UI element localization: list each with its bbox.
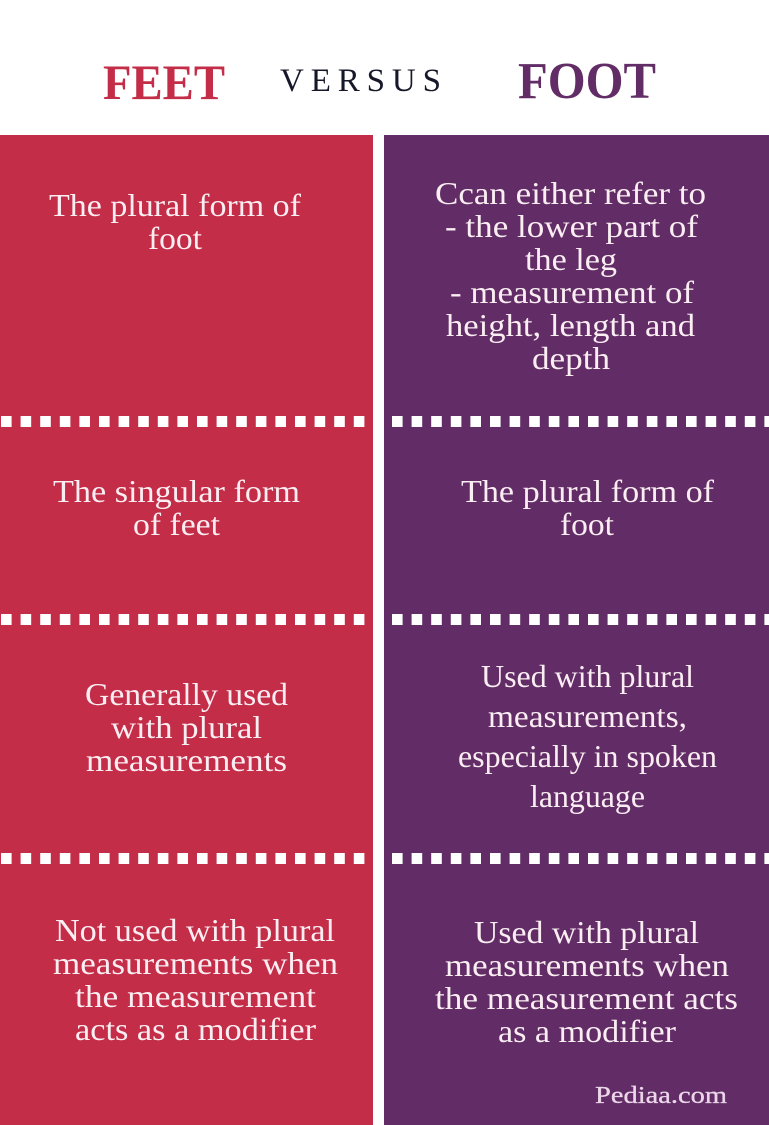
panel: feet column bbox=[0, 135, 373, 1125]
text: feet row 1: foot bbox=[148, 220, 202, 256]
text: feet row 3: Generally used bbox=[85, 676, 288, 712]
text: foot row 1: - measurement of bbox=[450, 274, 694, 310]
text: feet row 2 bbox=[53, 473, 300, 542]
text: feet row 4: acts as a modifier bbox=[75, 1011, 316, 1047]
text: foot row 3: especially in spoken bbox=[458, 738, 717, 774]
text: feet row 4: measurements when bbox=[53, 945, 338, 981]
text: foot row 3: Used with plural bbox=[481, 658, 694, 694]
text: foot row 1: depth bbox=[532, 340, 610, 376]
text: foot row 1: height, length and bbox=[446, 307, 695, 343]
text: foot row 4: the measurement acts bbox=[435, 980, 738, 1016]
text: feet row 2: of feet bbox=[133, 506, 220, 542]
text: feet row 3: with plural bbox=[111, 709, 262, 745]
text: foot row 3: language bbox=[530, 778, 645, 814]
title: foot: FOOT bbox=[518, 53, 656, 110]
text: feet row 4 bbox=[53, 912, 338, 1047]
text: foot row 2: The plural form of bbox=[461, 473, 714, 509]
text: feet row 1: The plural form of bbox=[49, 187, 301, 223]
text: foot row 4 bbox=[435, 914, 738, 1049]
text: foot row 1: Ccan either refer to bbox=[435, 175, 706, 211]
text: foot row 2 bbox=[461, 473, 714, 542]
text: foot row 3 bbox=[458, 658, 717, 814]
text: foot row 2: foot bbox=[560, 506, 614, 542]
text: feet row 4: Not used with plural bbox=[55, 912, 335, 948]
panel: foot column bbox=[384, 135, 769, 1125]
text: foot row 1 bbox=[435, 175, 706, 376]
text: foot row 1: - the lower part of bbox=[445, 208, 698, 244]
text: foot row 3: measurements, bbox=[488, 698, 687, 734]
text: feet row 4: the measurement bbox=[75, 978, 316, 1014]
text: feet row 2: The singular form bbox=[53, 473, 300, 509]
text: foot row 1: the leg bbox=[525, 241, 617, 277]
text: foot row 4: Used with plural bbox=[474, 914, 699, 950]
title: versus: VERSUS bbox=[280, 63, 441, 99]
text: foot row 4: as a modifier bbox=[498, 1013, 676, 1049]
text: feet row 3: measurements bbox=[86, 742, 287, 778]
text: feet row 1 bbox=[49, 187, 301, 256]
text: feet row 3 bbox=[85, 676, 288, 778]
watermark: Pediaa.com: Pediaa.com bbox=[595, 1083, 727, 1109]
title: feet: FEET bbox=[103, 54, 225, 110]
text: foot row 4: measurements when bbox=[445, 947, 729, 983]
